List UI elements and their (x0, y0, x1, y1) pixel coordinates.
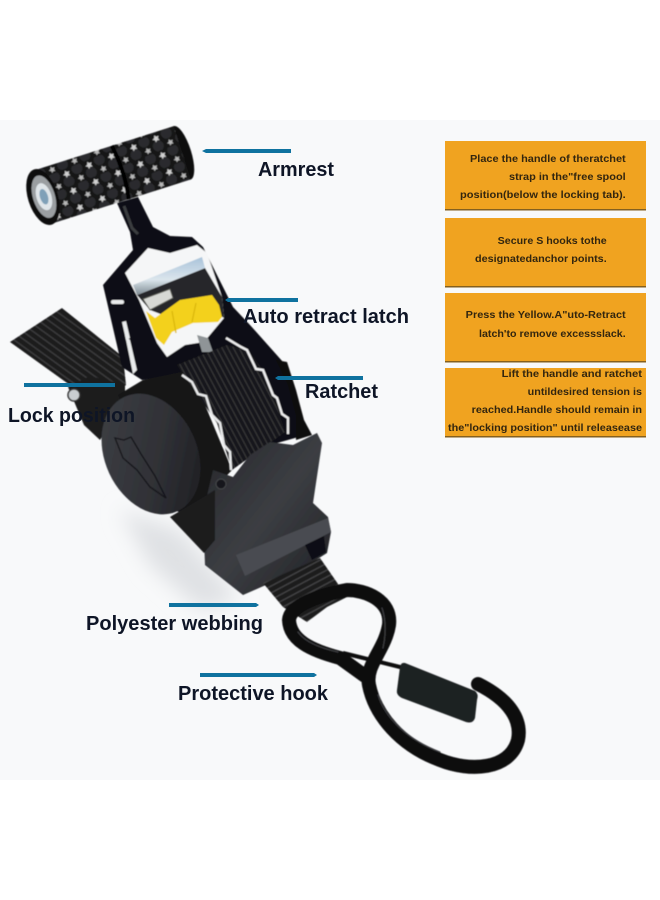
spool bracket pin (197, 335, 213, 352)
latch shading (172, 303, 196, 333)
callout: lock position (8, 383, 135, 427)
S hook (289, 590, 519, 767)
panel: step 1: Place the handle of theratchet (470, 153, 626, 165)
panel: step 1 (445, 141, 646, 210)
photo background (0, 120, 660, 780)
panel: step 2 (445, 218, 646, 288)
bottom webbing (263, 558, 347, 622)
panel: step 4 (445, 368, 646, 438)
frame inner dark plate (137, 268, 224, 318)
callout: lock position: Lock position (8, 405, 135, 427)
ratchet teeth front (182, 375, 231, 470)
keeper tab (397, 663, 478, 722)
handle grip (20, 122, 200, 229)
panel: step 3: latch'to remove excessslack. (479, 328, 626, 340)
yellow latch (146, 295, 222, 345)
callout: ratchet (275, 376, 378, 403)
housing ridge highlight (236, 518, 331, 576)
callout: protective hook: Protective hook (178, 683, 329, 705)
callout: protective hook (178, 673, 329, 705)
spring detail (143, 289, 173, 310)
panel: step 3: Press the Yellow.A"uto-Retract (466, 309, 626, 321)
grip end cap (20, 165, 66, 229)
callout: polyester webbing: Polyester webbing (86, 613, 263, 635)
rear strap (10, 308, 126, 405)
callout: auto retract latch (225, 298, 409, 328)
panel: step 1: position(below the locking tab). (460, 189, 626, 201)
ratchet teeth rear (226, 338, 288, 434)
round end cap back (170, 490, 215, 553)
callout: armrest: Armrest (258, 159, 334, 181)
keeper wire (343, 653, 404, 668)
frame slots (111, 300, 137, 374)
outer rear frame (276, 360, 312, 440)
callout: polyester webbing (86, 603, 263, 635)
panel: step 4: untildesired tension is (528, 386, 642, 398)
silver cross bar (133, 257, 205, 295)
panel: step 1: strap in the"free spool (509, 171, 626, 183)
callout: auto retract latch: Auto retract latch (243, 306, 409, 328)
grip center band (112, 145, 131, 199)
panel: step 2: designatedanchor points. (475, 253, 607, 265)
round end cap (83, 377, 219, 531)
callout: armrest (202, 149, 334, 181)
panel: step 4: Lift the handle and ratchet (502, 368, 643, 380)
cap rear wall (118, 372, 232, 525)
cap logo (115, 437, 166, 498)
housing pivot bolt (216, 479, 226, 489)
panel: step 2: Secure S hooks tothe (498, 235, 607, 247)
frame opening (125, 245, 224, 357)
panel: step 3 (445, 293, 646, 362)
panel: step 4: the"locking position" until releasease (448, 422, 642, 434)
stem highlight (124, 206, 138, 234)
housing slot (305, 536, 326, 560)
ratchet strap product (10, 122, 519, 767)
lower housing (203, 433, 331, 595)
ground shadow (120, 510, 240, 610)
callout: ratchet: Ratchet (305, 381, 378, 403)
handle stem and frame (103, 197, 302, 445)
webbing spool (177, 345, 285, 470)
panel: step 4: reached.Handle should remain in (472, 404, 642, 416)
lock bracket (68, 376, 125, 440)
